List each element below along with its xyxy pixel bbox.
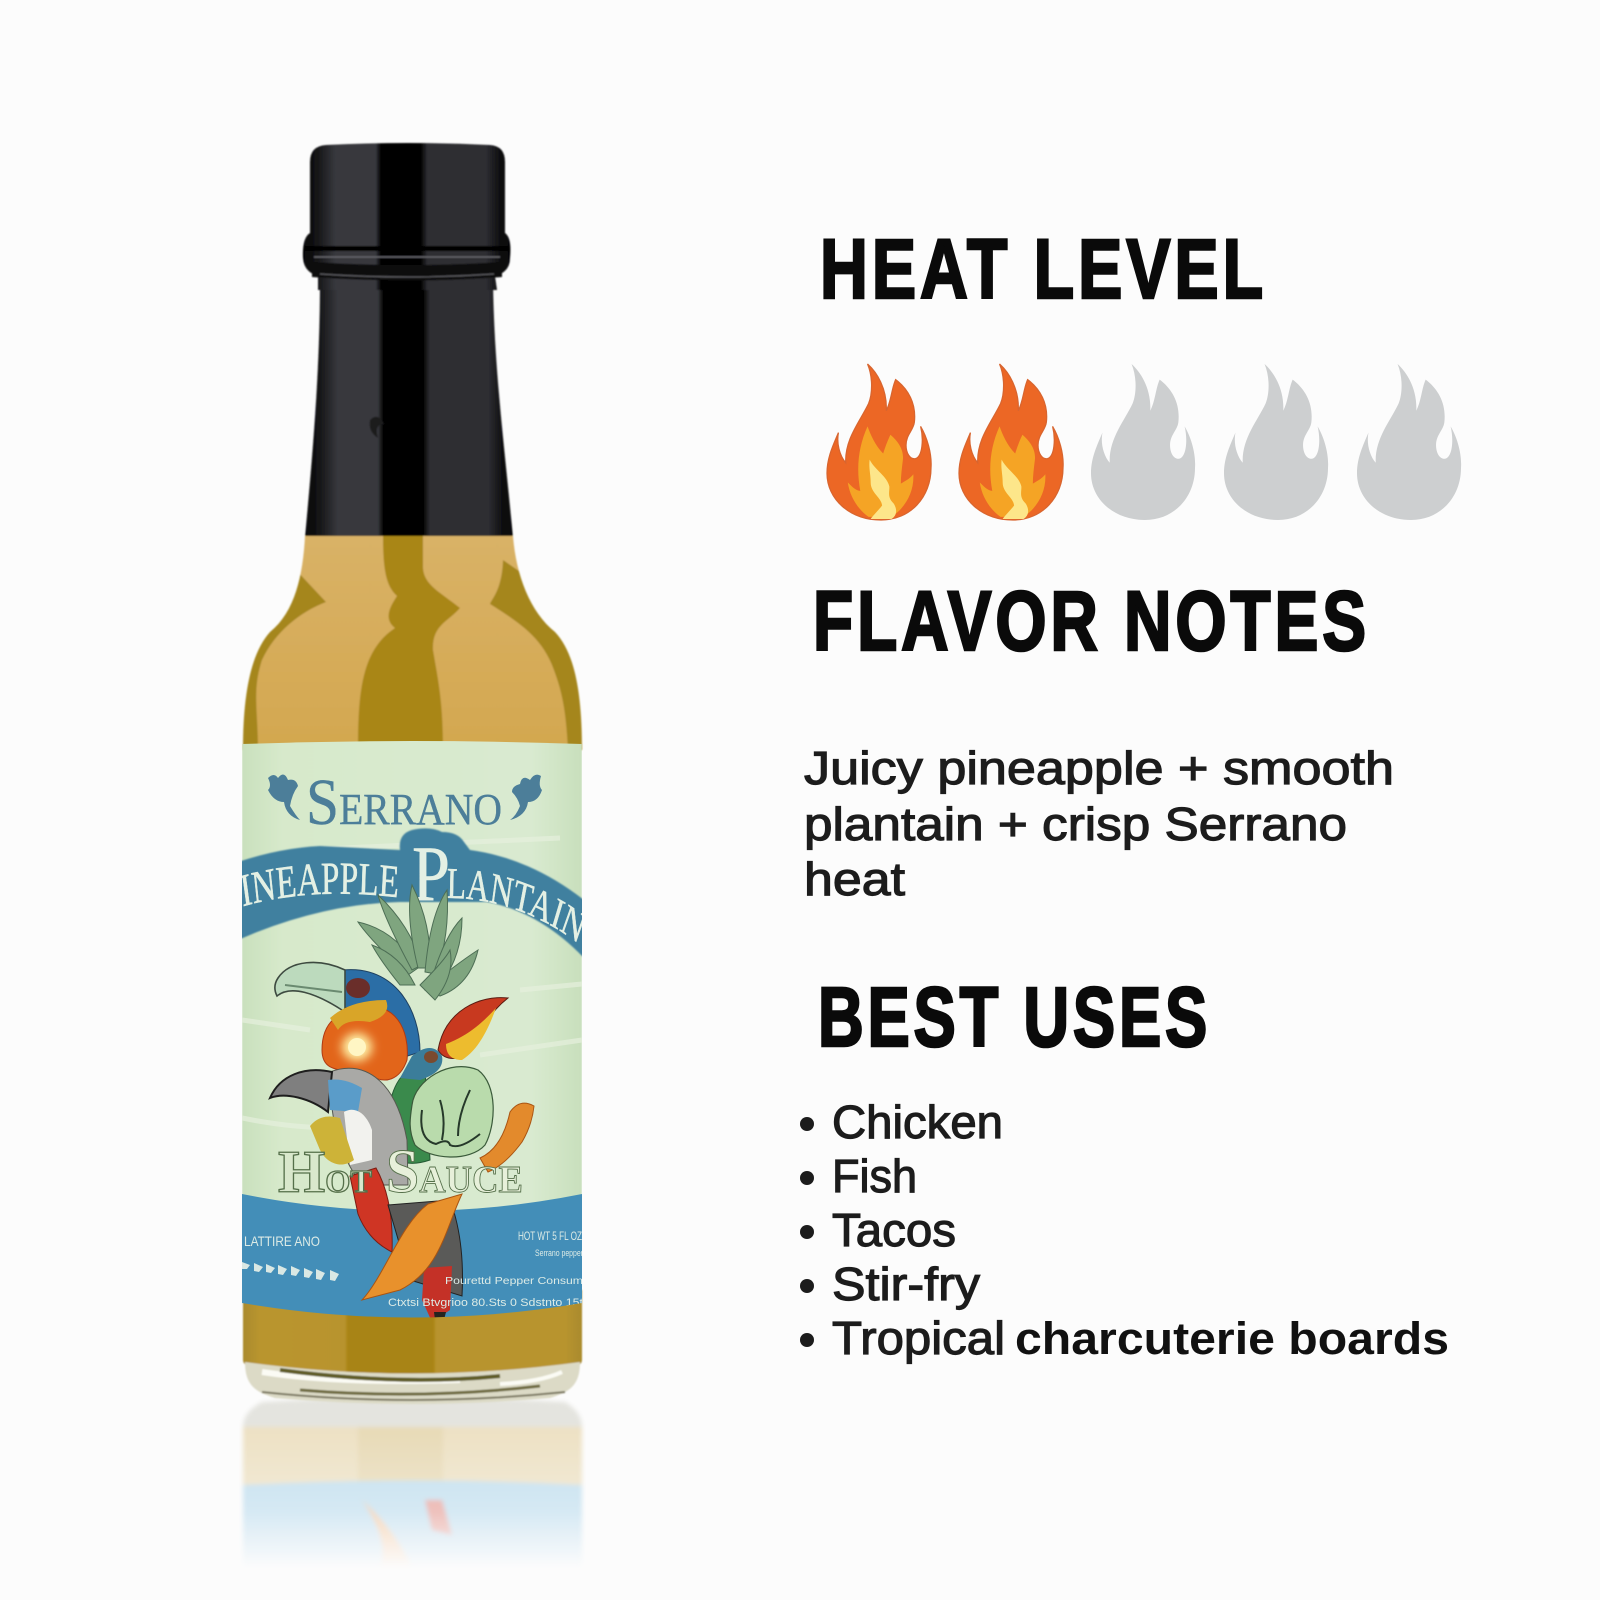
icon: right fleuron <box>510 775 542 820</box>
icon: active flame 2 <box>959 364 1063 520</box>
label hot sauce text: HOT <box>278 1139 372 1205</box>
label small flame row <box>242 1262 339 1281</box>
illustration: orange fruit <box>322 1000 407 1080</box>
label blue band <box>242 1194 582 1318</box>
label hot sauce text: SAUCE <box>386 1138 523 1206</box>
bottle label <box>242 741 582 1318</box>
sauce base <box>243 1290 582 1376</box>
illustration: red wing <box>350 1168 392 1252</box>
illustration: right toucan <box>400 998 508 1080</box>
flavor notes text: Juicy pineapple + smooth <box>804 742 1394 794</box>
label blue band small text: Ctxtsi Btvgrioo 80.Sts 0 Sdstnto 15t <box>388 1297 583 1309</box>
label blue band small text: Serrano pepper <box>535 1248 583 1258</box>
heading: heat level: HEAT LEVEL <box>820 222 1267 316</box>
best uses list: Stir-fry <box>832 1258 980 1310</box>
heat level flames <box>827 364 1461 520</box>
bottle <box>240 143 590 1404</box>
best uses list <box>800 1096 1449 1364</box>
bottle cap <box>303 143 510 290</box>
flavor notes text: plantain + crisp Serrano <box>804 798 1347 850</box>
icon: inactive flame 3 <box>1091 364 1195 520</box>
best uses list: Chicken <box>832 1096 1003 1148</box>
label blue band small text: Pourettd Pepper Consum <box>445 1276 583 1287</box>
illustration: dark body <box>388 1200 462 1296</box>
illustration: red tail <box>422 1266 452 1322</box>
infographic canvas <box>240 142 1462 1560</box>
flavor notes text: heat <box>804 853 905 905</box>
label blue band small text: HOT WT 5 FL OZ <box>518 1229 582 1243</box>
illustration: lower toucan <box>270 1068 408 1185</box>
bottle reflection <box>243 1397 582 1568</box>
illustration: pineapple crown <box>358 885 478 1000</box>
best uses list: Tropical <box>832 1312 1005 1364</box>
icon: inactive flame 5 <box>1357 364 1461 520</box>
banner word two <box>414 848 582 942</box>
icon: left fleuron <box>268 774 300 820</box>
banner word one: PINEAPPLE <box>242 863 398 906</box>
icon: active flame 1 <box>827 364 931 520</box>
heading: flavor notes: FLAVOR NOTES <box>813 574 1370 668</box>
illustration: plantain branch <box>362 1103 534 1300</box>
illustration: melon <box>410 1067 493 1157</box>
best uses list: Fish <box>832 1150 917 1202</box>
sauce shoulder <box>240 530 590 755</box>
label banner <box>238 828 584 958</box>
banner word two: P <box>412 830 450 917</box>
banner word two: LANTAIN <box>448 868 582 942</box>
label hot sauce text <box>278 1150 522 1193</box>
illustration: green leaf <box>392 1076 430 1164</box>
label blue band small text: LATTIRE ANO <box>244 1233 320 1249</box>
icon: inactive flame 4 <box>1224 364 1328 520</box>
glass bottom <box>245 1362 580 1404</box>
bottle neck <box>305 280 513 538</box>
label brand name: SERRANO <box>306 766 502 839</box>
flavor notes text <box>804 742 1394 905</box>
illustration: upper toucan <box>275 962 420 1060</box>
best uses list: charcuterie boards <box>1015 1313 1449 1364</box>
label blue band small text <box>244 1229 583 1309</box>
best uses list: Tacos <box>832 1204 956 1256</box>
heading: best uses: BEST USES <box>818 970 1211 1064</box>
banner word one <box>242 863 398 906</box>
